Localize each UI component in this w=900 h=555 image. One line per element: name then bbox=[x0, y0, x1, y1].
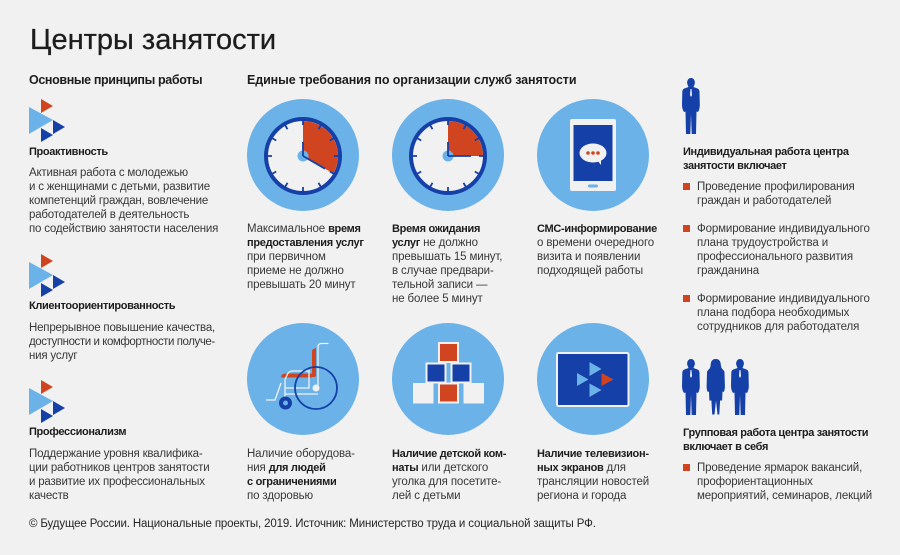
requirement text 3: о времени очередного bbox=[537, 237, 654, 249]
requirement text 1: при первичном bbox=[247, 251, 326, 263]
principle text 3: ции работников центров занятости bbox=[29, 462, 209, 474]
item 3: плана подбора необходимых bbox=[697, 307, 849, 319]
requirement text 1: превышать 20 минут bbox=[247, 279, 356, 291]
principle text 3: качеств bbox=[29, 490, 69, 502]
item 1: Проведение профилирования bbox=[697, 181, 855, 193]
requirement text 6: Наличие телевизион- bbox=[537, 448, 649, 460]
bullet 3 bbox=[683, 295, 690, 302]
requirement text 6: региона и города bbox=[537, 490, 626, 502]
principle text 3: Поддержание уровня квалифика- bbox=[29, 448, 203, 460]
heading: individual work bbox=[683, 146, 850, 172]
requirement text 2: превышать 15 минут, bbox=[392, 251, 502, 263]
item 2 bbox=[697, 223, 870, 277]
requirement text 2 bbox=[392, 223, 502, 305]
title: Центры занятости bbox=[30, 24, 276, 56]
principle text 3 bbox=[29, 448, 209, 502]
requirement text 5 bbox=[392, 448, 506, 502]
item 3 bbox=[697, 293, 870, 333]
requirement text 1: приеме не должно bbox=[247, 265, 344, 277]
requirement text 1: предоставления услуг bbox=[247, 237, 364, 249]
icon: toy blocks bbox=[392, 323, 504, 435]
icon: TV screen bbox=[537, 323, 649, 435]
heading: group work bbox=[683, 427, 868, 453]
item: group work bbox=[697, 462, 872, 502]
principle name 3: Профессионализм bbox=[29, 426, 126, 438]
requirement text 2: Время ожидания bbox=[392, 223, 480, 235]
requirement text 1 bbox=[247, 223, 364, 291]
icon: single person bbox=[682, 78, 700, 134]
bullet 2 bbox=[683, 225, 690, 232]
requirement text 4: по здоровью bbox=[247, 490, 313, 502]
requirement text 4: с ограничениями bbox=[247, 476, 336, 488]
requirement text 6 bbox=[537, 448, 649, 502]
principle text 1: компетенций граждан, вовлечение bbox=[29, 195, 208, 207]
principle name 1: Проактивность bbox=[29, 146, 108, 158]
heading: principles: Основные принципы работы bbox=[29, 73, 202, 87]
requirement text 3: визита и появлении bbox=[537, 251, 640, 263]
icon: logo 3 bbox=[29, 380, 65, 423]
item 2: плана трудоустройства и bbox=[697, 237, 828, 249]
requirement text 4: Наличие оборудова- bbox=[247, 448, 355, 460]
icon: group of people bbox=[682, 359, 749, 415]
requirement text 3 bbox=[537, 223, 657, 277]
item 2: Формирование индивидуального bbox=[697, 223, 870, 235]
item: group work: мероприятий, семинаров, лекций bbox=[697, 490, 872, 502]
heading: requirements: Единые требования по организации служб занятости bbox=[247, 73, 576, 87]
principle text 1: работодателей в деятельность bbox=[29, 209, 189, 221]
requirement text 6: трансляции новостей bbox=[537, 476, 649, 488]
footer source: © Будущее России. Национальные проекты, 2019. Источник: Министерство труда и социальной защиты РФ. bbox=[29, 518, 596, 530]
item 3: сотрудников для работодателя bbox=[697, 321, 859, 333]
requirement text 2: не более 5 минут bbox=[392, 293, 483, 305]
requirement text 2: тельной записи — bbox=[392, 279, 487, 291]
icon: logo 2 bbox=[29, 254, 65, 297]
principle text 1: Активная работа с молодежью bbox=[29, 167, 188, 179]
principle text 2: Непрерывное повышение качества, bbox=[29, 322, 215, 334]
requirement text 6: ных экранов для bbox=[537, 462, 626, 474]
principle name 2: Клиентоориентированность bbox=[29, 300, 175, 312]
requirement text 4 bbox=[247, 448, 355, 502]
heading: group work: Групповая работа центра занятости bbox=[683, 427, 868, 439]
bullet 1 bbox=[683, 183, 690, 190]
item 3: Формирование индивидуального bbox=[697, 293, 870, 305]
item 1: граждан и работодателей bbox=[697, 195, 831, 207]
principle text 1: и с женщинами с детьми, развитие bbox=[29, 181, 210, 193]
item: group work: профориентационных bbox=[697, 476, 813, 488]
principle text 1 bbox=[29, 166, 218, 235]
requirement text 3: подходящей работы bbox=[537, 265, 643, 277]
requirement text 5: лей с детьми bbox=[392, 490, 460, 502]
requirement text 1: Максимальное время bbox=[247, 223, 361, 235]
principle text 2: ния услуг bbox=[29, 350, 77, 362]
bullet: group work bbox=[683, 464, 690, 471]
item 2: профессионального развития bbox=[697, 251, 853, 263]
icon: clock 20 minutes bbox=[247, 99, 359, 211]
item: group work: Проведение ярмарок вакансий, bbox=[697, 462, 862, 474]
principle text 3: и развитие их профессиональных bbox=[29, 476, 205, 488]
requirement text 2: в случае предвари- bbox=[392, 265, 494, 277]
principle text 1: по содействию занятости населения bbox=[29, 223, 218, 235]
requirement text 3: СМС-информирование bbox=[537, 223, 657, 235]
requirement text 5: Наличие детской ком- bbox=[392, 448, 506, 460]
requirement text 2: услуг не должно bbox=[392, 237, 478, 249]
requirement text 5: уголка для посетите- bbox=[392, 476, 501, 488]
requirement text 5: наты или детского bbox=[392, 462, 488, 474]
icon: smartphone bbox=[537, 99, 649, 211]
requirement text 4: ния для людей bbox=[247, 462, 326, 474]
icon: wheelchair bbox=[247, 323, 359, 435]
bullet list: individual work bbox=[683, 181, 870, 333]
heading: group work: включает в себя bbox=[683, 441, 768, 453]
principle text 2: доступности и комфортности получе- bbox=[29, 336, 215, 348]
heading: individual work: Индивидуальная работа центра bbox=[683, 146, 849, 158]
principle text 2 bbox=[29, 322, 215, 362]
icon: logo 1 bbox=[29, 99, 65, 142]
heading: individual work: занятости включает bbox=[683, 160, 787, 172]
item 2: гражданина bbox=[697, 265, 759, 277]
icon: clock 15 minutes bbox=[392, 99, 504, 211]
item 1 bbox=[697, 181, 855, 207]
